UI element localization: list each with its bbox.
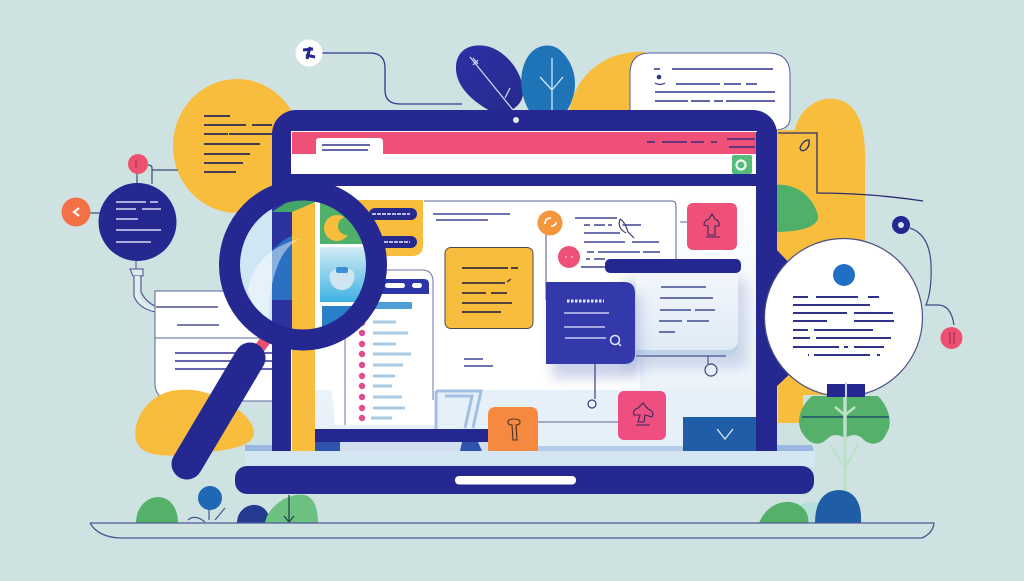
yellow circle left — [173, 79, 301, 213]
navy bar lower — [315, 429, 490, 442]
navy text circle — [98, 183, 176, 261]
green button — [732, 155, 752, 174]
shelf line — [90, 523, 934, 538]
list panel — [320, 270, 435, 425]
speech card top right — [630, 53, 790, 130]
document panel left — [155, 291, 275, 401]
top connector icon — [296, 40, 462, 104]
shelf plants left — [136, 486, 318, 523]
pink node small — [558, 246, 580, 268]
lower screen tint — [300, 186, 757, 452]
blue frame fragment — [436, 391, 481, 429]
card pin icon — [705, 356, 717, 376]
yellow note — [445, 248, 533, 328]
pin connector — [588, 364, 596, 408]
illustration: laptop with magnifying glass — [62, 40, 962, 539]
navy bar on card — [605, 259, 741, 273]
navy divider bar — [291, 174, 757, 186]
yellow tab with pills — [315, 200, 423, 256]
list header — [350, 279, 429, 294]
list highlight bar — [372, 302, 412, 309]
blue card — [546, 282, 640, 378]
short text lines — [464, 359, 493, 366]
laptop base — [235, 445, 815, 494]
white address tab — [316, 138, 383, 154]
yellow blob top — [569, 52, 660, 112]
chevron button — [683, 417, 757, 451]
shelf plants right — [759, 490, 861, 523]
pink icon upper — [680, 203, 737, 250]
navy leaf — [456, 45, 523, 112]
connector from circle to document — [130, 261, 155, 312]
yellow sidebar — [292, 186, 315, 451]
large text circle — [764, 238, 922, 396]
camera dot — [513, 117, 519, 123]
blue leaf — [521, 46, 575, 112]
green blob right — [775, 185, 818, 232]
connector outline right — [778, 133, 923, 201]
heading lines — [433, 214, 510, 220]
content text lines — [575, 218, 660, 267]
orange node with line — [538, 210, 562, 300]
lens contents — [248, 200, 366, 330]
small drop icon — [800, 140, 809, 151]
pointing hand icon — [619, 219, 634, 238]
orange icon — [488, 407, 538, 451]
yellow blob right — [775, 99, 865, 423]
navy wedge behind circle — [775, 248, 794, 388]
connector lines left — [137, 165, 178, 184]
pink node — [128, 154, 148, 174]
magnifying glass — [187, 190, 376, 464]
right connectors — [892, 216, 962, 349]
yellow blob bottom left — [135, 390, 254, 456]
orange node — [62, 198, 100, 226]
list rows — [359, 320, 411, 421]
laptop screen — [272, 110, 777, 452]
pink header bar — [292, 132, 757, 154]
plant — [799, 382, 890, 490]
content card outline — [424, 201, 676, 300]
pink icon lower — [538, 391, 666, 440]
white-blue card — [605, 259, 748, 368]
